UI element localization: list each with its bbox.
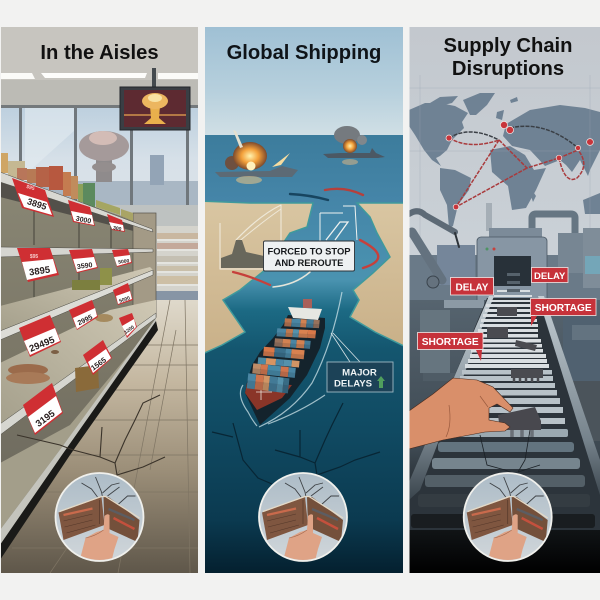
tag 6: 5000 (118, 258, 130, 266)
tag 9: 2995 (77, 314, 94, 327)
label: delay left (450, 278, 494, 295)
tag 8: 29495 (28, 334, 57, 355)
tag 2 (68, 200, 95, 226)
mushroom cloud outside (79, 131, 129, 182)
map grid (409, 75, 600, 240)
tag 10: 1200 (123, 324, 136, 336)
aisle floor with tile lines (0, 300, 198, 573)
title: Supply Chain Disruptions: Supply Chain (444, 35, 572, 57)
empty shelving unit (0, 153, 158, 560)
shelf 2 (0, 247, 153, 257)
tag 1: $95 (25, 184, 35, 192)
panel: Supply Chain Disruptions (409, 27, 600, 573)
TV screen (120, 68, 190, 130)
tag 4: 3895 (28, 265, 52, 278)
back aisle shelves (156, 226, 198, 301)
tag 9 (69, 300, 98, 330)
shelf 3 (0, 267, 153, 331)
factory machinery (409, 203, 600, 325)
icon: empty wallet (464, 473, 552, 561)
ship bridge (288, 299, 322, 320)
conveyor belt (409, 290, 600, 530)
map pins (446, 121, 593, 210)
label: shortage left: SHORTAGE (422, 337, 479, 348)
shelf 4 (0, 300, 156, 424)
tag 10 (119, 313, 137, 338)
sky (205, 27, 403, 135)
callout: major delays: DELAYS (334, 378, 373, 390)
title: Supply Chain Disruptions (444, 35, 572, 80)
sand coast left (198, 201, 313, 356)
robot arm (409, 211, 459, 288)
label: shortage right: SHORTAGE (535, 303, 592, 314)
tag 8 (19, 315, 61, 357)
red and blue route arrows (233, 189, 378, 287)
tag 11: 1565 (89, 355, 108, 373)
label: delay left: DELAY (456, 282, 489, 293)
top shelf goods (0, 153, 133, 221)
tag 2: 3000 (75, 215, 92, 226)
label: delay right: DELAY (534, 271, 566, 282)
tag 11 (83, 340, 112, 375)
reroute inset (320, 206, 357, 247)
panel background (409, 27, 600, 317)
sand coast right (349, 202, 403, 346)
icon: empty wallet (259, 473, 347, 561)
callout: forced to stop and reroute: AND REROUTE (275, 257, 343, 268)
label: shortage left (418, 332, 483, 361)
tag 1 (12, 178, 54, 217)
rollers (465, 290, 549, 368)
pointer line (331, 333, 360, 362)
callout: forced to stop and reroute (264, 241, 354, 271)
warship left exploding (215, 130, 298, 184)
callout: forced to stop and reroute: FORCED TO STOP (268, 246, 350, 256)
tag 6 (112, 249, 132, 267)
world map (409, 93, 600, 228)
tag 3 (107, 214, 125, 233)
wake lines (240, 292, 342, 427)
shelf 5 (1, 351, 132, 528)
stopped ship inset (220, 205, 281, 269)
tag 5: 3590 (77, 262, 93, 271)
tag 5 (69, 249, 98, 273)
hand holding chip (409, 378, 541, 449)
sea crack (212, 403, 380, 484)
label: shortage right (530, 298, 596, 326)
container rows (247, 318, 320, 393)
lower factory floor (409, 300, 600, 573)
shelf 1 (0, 172, 153, 232)
shipping routes (449, 126, 584, 207)
tag 1: 3895 (26, 196, 48, 212)
callout: major delays: MAJOR (342, 368, 377, 378)
sea (205, 135, 403, 573)
tag 7: 5000 (118, 295, 131, 305)
ceiling (0, 27, 198, 106)
panel: Global Shipping (198, 27, 410, 573)
callout: major delays (327, 362, 393, 392)
container ship (245, 299, 325, 425)
store windows (0, 105, 198, 227)
panel: In the Aisles (0, 27, 198, 573)
title: Global Shipping: Global Shipping (227, 42, 381, 64)
crack over conveyor (480, 430, 540, 475)
icon: up arrow (377, 376, 385, 388)
title: Supply Chain Disruptions: Disruptions (452, 58, 564, 80)
tag 4: $95 (30, 254, 38, 260)
label: delay right (532, 268, 568, 282)
price tags (12, 178, 137, 435)
shelf goods (6, 268, 113, 392)
icon: empty wallet (56, 473, 144, 561)
tag 4 (17, 248, 59, 282)
warship right exploding (323, 126, 385, 165)
tag 7 (113, 283, 133, 305)
side machines (420, 300, 600, 441)
tag 3: 300 (113, 225, 122, 233)
title: In the Aisles: In the Aisles (40, 42, 159, 64)
tag 12: 3195 (34, 408, 58, 430)
tag 12 (23, 383, 63, 435)
microchips on belt (487, 273, 543, 382)
floor crack (17, 395, 165, 475)
